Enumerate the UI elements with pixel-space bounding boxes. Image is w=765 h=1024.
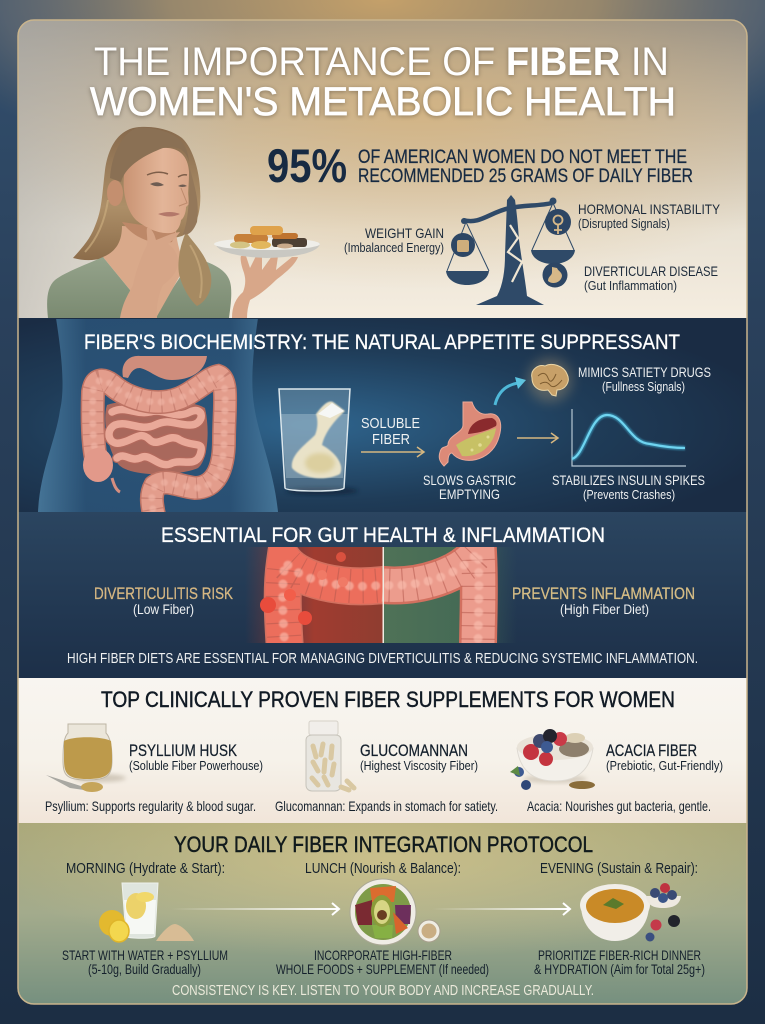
arrow: to brain — [495, 377, 526, 405]
supplement benefits: Acacia: Nourishes gut bacteria, gentle. — [527, 798, 711, 814]
footer note: CONSISTENCY IS KEY. LISTEN TO YOUR BODY AND INCREASE GRADUALLY. — [172, 983, 594, 999]
step descriptions: (5-10g, Build Gradually) — [88, 961, 201, 977]
step descriptions: WHOLE FOODS + SUPPLEMENT (If needed) — [276, 961, 489, 977]
section heading: FIBER'S BIOCHEMISTRY: THE NATURAL APPETITE SUPPRESSANT — [84, 331, 680, 354]
timeline headings: EVENING (Sustain & Repair): — [540, 860, 698, 877]
label: weight gain: (Imbalanced Energy) — [344, 240, 444, 255]
supplement benefits: Psyllium: Supports regularity & blood sugar. — [45, 798, 256, 814]
label: prevents inflammation — [512, 584, 695, 617]
panel: biochemistry — [18, 318, 747, 515]
section heading: YOUR DAILY FIBER INTEGRATION PROTOCOL — [174, 832, 593, 857]
label: diverticulitis risk: (Low Fiber) — [133, 601, 194, 617]
label: mimics satiety drugs: MIMICS SATIETY DRUGS — [578, 364, 711, 380]
icon: acacia bowl — [510, 729, 595, 790]
icon: soup and berries — [580, 883, 681, 942]
statistic: 95%: 95% — [267, 139, 347, 192]
illustration: colon comparison — [250, 547, 506, 643]
label: diverticulitis risk — [95, 587, 233, 617]
label: weight gain — [344, 228, 444, 254]
label: glucomannan: GLUCOMANNAN — [360, 741, 468, 760]
icon: water glass with lemon and psyllium — [99, 883, 194, 942]
icon: psyllium jar — [46, 724, 126, 792]
icon: broken scale — [446, 195, 575, 305]
label: soluble fiber: FIBER — [372, 431, 410, 448]
step descriptions: PRIORITIZE FIBER-RICH DINNER — [538, 947, 701, 963]
label: glucomannan: (Highest Viscosity Fiber) — [360, 758, 478, 773]
statistic: 95%: OF AMERICAN WOMEN DO NOT MEET THE — [358, 147, 687, 168]
title: WOMEN'S METABOLIC HEALTH — [90, 80, 676, 124]
arrow: morning to lunch — [171, 903, 339, 915]
statistic: 95%: RECOMMENDED 25 GRAMS OF DAILY FIBER — [358, 166, 693, 187]
label: hormonal instability: HORMONAL INSTABILITY — [578, 201, 721, 217]
step descriptions: START WITH WATER + PSYLLIUM — [62, 947, 228, 963]
label: diverticulitis risk: DIVERTICULITIS RISK — [94, 584, 234, 603]
label: weight gain: WEIGHT GAIN — [365, 225, 444, 241]
panel: supplements — [18, 678, 747, 824]
step descriptions — [62, 947, 705, 977]
label: slows gastric emptying — [424, 476, 516, 499]
arrow: lunch to evening — [432, 903, 570, 915]
label: psyllium husk: PSYLLIUM HUSK — [129, 741, 238, 760]
step descriptions: INCORPORATE HIGH-FIBER — [314, 947, 452, 963]
title — [88, 46, 676, 120]
chart: insulin curve — [572, 409, 686, 466]
icon: salad plate — [350, 879, 440, 945]
label: stabilizes insulin spikes — [552, 476, 704, 502]
timeline headings: LUNCH (Nourish & Balance): — [305, 860, 461, 877]
step descriptions: & HYDRATION (Aim for Total 25g+) — [534, 961, 705, 977]
title: THE IMPORTANCE OF FIBER IN — [94, 40, 669, 84]
label: acacia fiber — [606, 744, 722, 772]
label: diverticular disease — [584, 266, 718, 292]
label: psyllium husk: (Soluble Fiber Powerhouse) — [129, 758, 263, 773]
label: diverticular disease: DIVERTICULAR DISEASE — [584, 263, 718, 279]
arrow: to stomach — [361, 447, 424, 457]
label: soluble fiber — [362, 418, 420, 444]
arrow: to insulin chart — [517, 433, 558, 443]
label: prevents inflammation: PREVENTS INFLAMMATION — [512, 584, 695, 603]
label: soluble fiber: SOLUBLE — [361, 415, 420, 432]
supplement benefits: Glucomannan: Expands in stomach for satiety. — [275, 798, 498, 814]
label: slows gastric emptying: EMPTYING — [439, 486, 500, 502]
label: mimics satiety drugs: (Fullness Signals) — [602, 379, 685, 394]
panel: fiber deficit hero — [18, 20, 747, 319]
panel: daily protocol — [18, 823, 747, 1004]
label: glucomannan — [360, 744, 478, 772]
statistic: 95% — [268, 148, 692, 182]
icon: glucomannan bottle — [306, 721, 354, 791]
timeline headings: MORNING (Hydrate & Start): — [66, 860, 225, 877]
label: acacia fiber: ACACIA FIBER — [606, 741, 697, 760]
label: stabilizes insulin spikes: STABILIZES INSULIN SPIKES — [552, 472, 705, 488]
label: diverticular disease: (Gut Inflammation) — [584, 278, 677, 293]
label: mimics satiety drugs — [578, 368, 710, 394]
illustration: stomach — [439, 402, 501, 466]
panel: gut health — [18, 512, 747, 679]
section heading: ESSENTIAL FOR GUT HEALTH & INFLAMMATION — [161, 524, 605, 547]
label: prevents inflammation: (High Fiber Diet) — [560, 601, 649, 617]
illustration: glass with soluble fiber — [279, 389, 358, 495]
section heading: TOP CLINICALLY PROVEN FIBER SUPPLEMENTS FOR WOMEN — [101, 687, 675, 712]
label: hormonal instability: (Disrupted Signals) — [578, 216, 670, 231]
woman holding plate — [47, 127, 320, 318]
illustration: torso and digestive tract — [38, 318, 278, 515]
label: acacia fiber: (Prebiotic, Gut-Friendly) — [606, 758, 723, 773]
label: hormonal instability — [578, 204, 720, 230]
label: slows gastric emptying: SLOWS GASTRIC — [423, 472, 516, 488]
supplement benefits — [46, 801, 710, 814]
label: psyllium husk — [130, 744, 262, 772]
label: stabilizes insulin spikes: (Prevents Crashes) — [583, 487, 675, 502]
divider line — [382, 547, 384, 643]
icon: brain — [528, 358, 572, 402]
timeline headings — [66, 860, 698, 877]
